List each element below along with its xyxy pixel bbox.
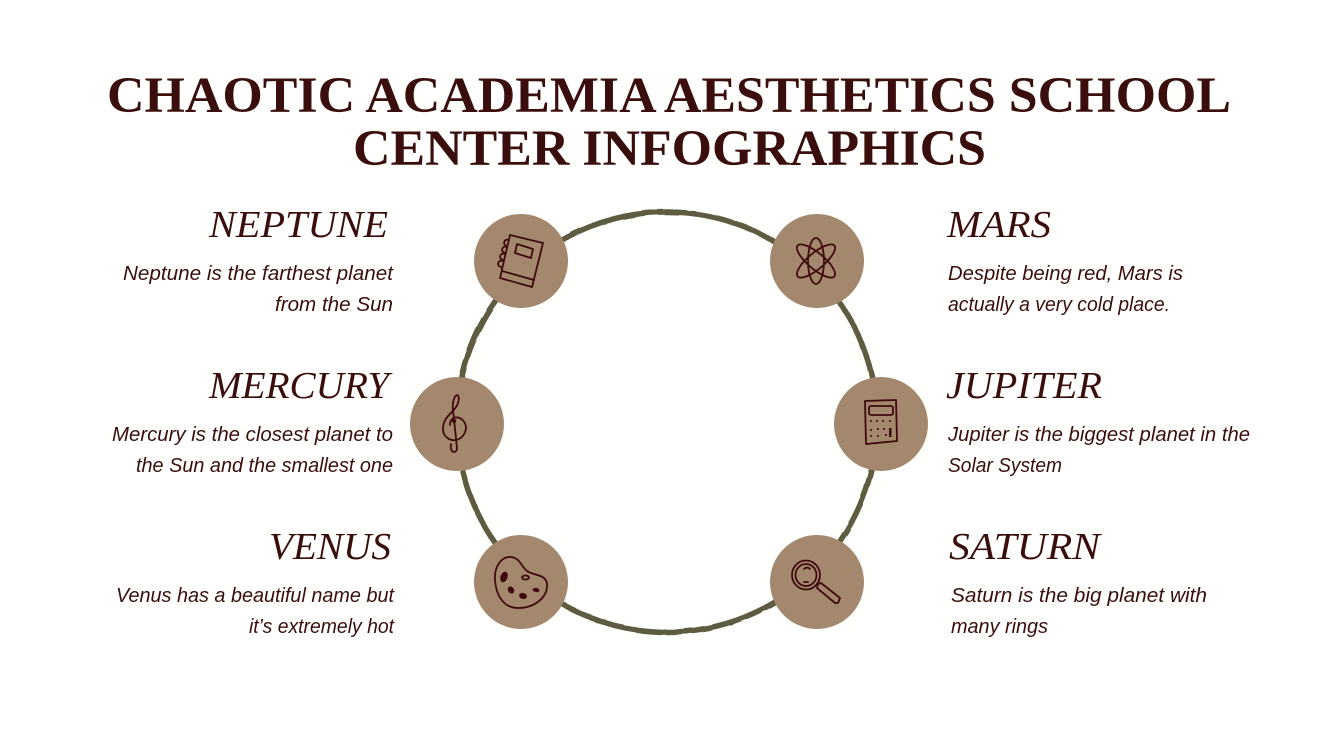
ring connecting the icons <box>457 212 877 632</box>
icon: notebook <box>474 214 568 308</box>
icon: atom <box>770 214 864 308</box>
title <box>107 68 1231 177</box>
panel: Jupiter text: JUPITER <box>946 365 1102 407</box>
panel: Mars text <box>946 204 1183 316</box>
icon: calculator <box>834 377 928 471</box>
panel: Saturn text: many rings <box>951 616 1048 638</box>
panel: Jupiter text: Jupiter is the biggest planet in the <box>947 424 1250 446</box>
panel: Neptune text: NEPTUNE <box>208 204 388 246</box>
title: CENTER INFOGRAPHICS <box>353 121 986 177</box>
panel: Neptune text: Neptune is the farthest planet <box>123 263 394 285</box>
panel: Mars text: MARS <box>946 204 1051 246</box>
panel: Mercury text: MERCURY <box>208 365 393 407</box>
title: CHAOTIC ACADEMIA AESTHETICS SCHOOL <box>107 68 1231 124</box>
panel: Venus text: it’s extremely hot <box>249 616 395 638</box>
panel: Saturn text: Saturn is the big planet with <box>951 585 1207 607</box>
panel: Jupiter text <box>946 365 1250 477</box>
panel: Mars text: actually a very cold place. <box>948 294 1170 316</box>
panel: Saturn text <box>949 526 1207 638</box>
panel: Venus text: VENUS <box>269 526 391 568</box>
icon: cookie <box>474 535 568 629</box>
panel: Venus text: Venus has a beautiful name but <box>116 585 395 607</box>
panel: Mars text: Despite being red, Mars is <box>948 263 1183 285</box>
panel: Mercury text <box>112 365 393 477</box>
panel: Venus text <box>116 526 395 638</box>
panel: Mercury text: Mercury is the closest planet to <box>112 424 393 446</box>
panel: Mercury text: the Sun and the smallest one <box>136 455 393 477</box>
panel: Jupiter text: Solar System <box>948 455 1062 477</box>
icon: treble clef <box>410 377 504 471</box>
panel: Saturn text: SATURN <box>949 526 1103 568</box>
panel: Neptune text <box>123 204 394 316</box>
icon: magnifying glass <box>770 535 864 629</box>
panel: Neptune text: from the Sun <box>275 294 393 316</box>
